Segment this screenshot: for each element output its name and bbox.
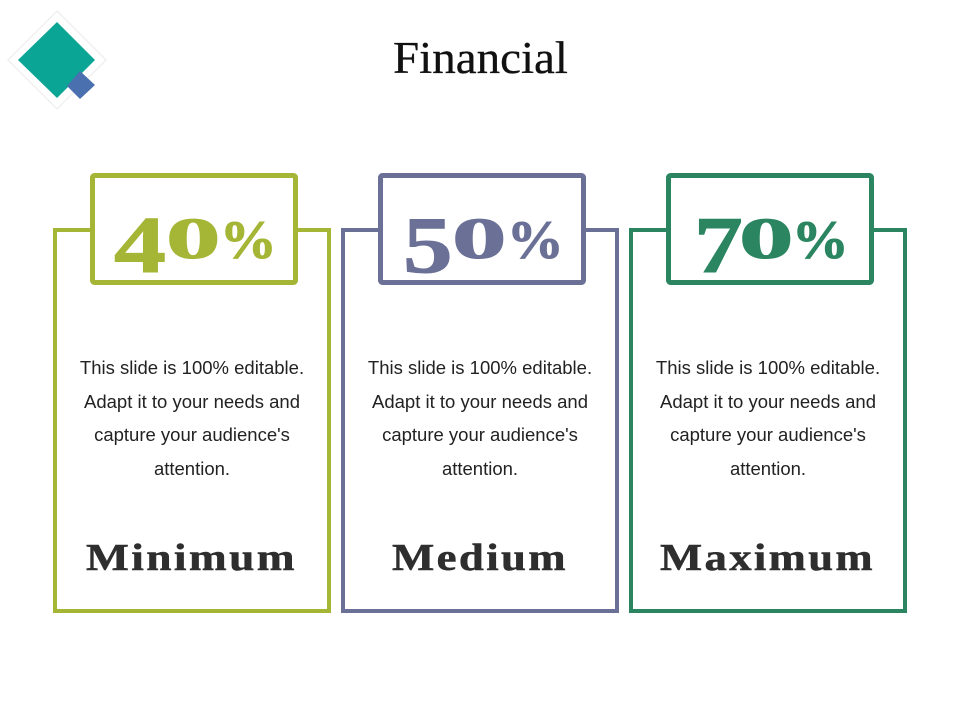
card outline: minimum xyxy=(55,230,329,611)
percent value: 50%: 5 xyxy=(403,202,453,290)
description: medium: Adapt it to your needs and xyxy=(372,391,588,412)
panel: minimum xyxy=(55,176,329,611)
percent value: 70%: % xyxy=(792,210,849,270)
percent value: 50% xyxy=(403,202,564,290)
percent value: 70%: 7 xyxy=(694,201,743,290)
card outline: maximum xyxy=(631,230,905,611)
label: minimum: Minimum xyxy=(86,537,297,579)
description: minimum: Adapt it to your needs and xyxy=(84,391,300,412)
description: maximum xyxy=(656,357,880,479)
description: minimum: capture your audience's xyxy=(94,424,290,445)
percent value: 40%: 4 xyxy=(114,201,166,290)
percent value: 70%: 0 xyxy=(739,206,794,271)
percent value: 50%: % xyxy=(507,210,564,270)
panel: medium xyxy=(343,176,617,611)
description: maximum: This slide is 100% editable. xyxy=(656,357,880,378)
percent box: 40% xyxy=(92,176,296,282)
description: maximum: attention. xyxy=(730,458,806,479)
panel: maximum xyxy=(631,176,905,611)
percent value: 40%: % xyxy=(220,210,277,270)
label: medium: Medium xyxy=(392,537,568,579)
description: minimum: This slide is 100% editable. xyxy=(80,357,304,378)
percent value: 40% xyxy=(114,201,277,290)
title: Financial xyxy=(393,33,568,83)
description: medium: attention. xyxy=(442,458,518,479)
description: minimum xyxy=(80,357,304,479)
description: medium: This slide is 100% editable. xyxy=(368,357,592,378)
description: medium xyxy=(368,357,592,479)
description: maximum: capture your audience's xyxy=(670,424,866,445)
label: maximum: Maximum xyxy=(660,537,875,579)
logo icon: diamonds xyxy=(8,11,106,109)
percent value: 40%: 0 xyxy=(166,206,221,271)
percent box: 50% xyxy=(380,176,584,282)
description: medium: capture your audience's xyxy=(382,424,578,445)
description: maximum: Adapt it to your needs and xyxy=(660,391,876,412)
card outline: medium xyxy=(343,230,617,611)
percent box: 70% xyxy=(668,176,872,282)
percent value: 50%: 0 xyxy=(452,206,507,271)
percent value: 70% xyxy=(694,201,849,290)
description: minimum: attention. xyxy=(154,458,230,479)
